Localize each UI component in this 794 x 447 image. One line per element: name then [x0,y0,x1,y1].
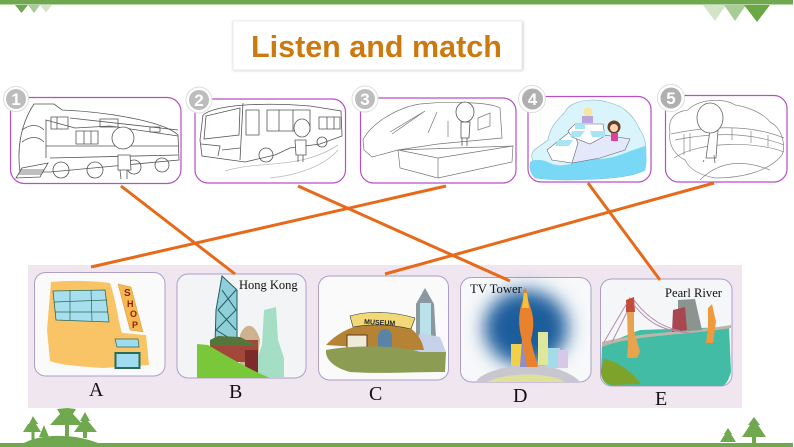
top green bar [0,0,793,4]
card D TV Tower [460,278,591,382]
boat passenger purple [582,108,593,123]
panel: card 4 boat [528,96,651,182]
top left triangles [15,5,52,13]
letter labels: D [513,385,527,407]
letter labels [89,379,667,410]
boat cloud [532,100,646,180]
letter labels: B [229,381,242,403]
top right triangles [703,5,770,22]
card A shop [34,272,165,376]
letter labels: A [89,379,104,401]
card E Pearl River [600,279,732,386]
boat water [530,146,646,179]
number badge 4: 4 [528,90,538,109]
boat hull [572,130,630,163]
number badge 2: 2 [194,91,204,110]
panel: card 5 bridge [666,96,787,182]
card C museum: MUSEUM [364,319,395,328]
title [233,21,523,70]
boat passenger pink [608,120,620,141]
boat cabin [568,124,605,144]
boat windows [555,124,605,146]
card C museum [318,276,448,380]
letter labels: C [369,383,382,405]
number badge 2 [186,87,212,113]
panel: card 3 van [360,98,516,183]
trees left [23,408,98,443]
number badge 3: 3 [360,90,370,109]
card B Hong Kong [177,274,306,378]
boat bow [547,130,578,163]
card A shop: O [130,309,137,319]
number badge 5 [658,84,684,112]
card A shop: P [132,320,138,330]
card A shop: H [127,299,134,309]
card B Hong Kong: Hong Kong [239,278,298,292]
number badge 3 [352,86,378,112]
bottom green bar [0,443,793,447]
card D TV Tower: TV Tower [470,282,523,296]
number badge 5: 5 [666,89,676,108]
panel: matching pictures background [28,265,742,410]
card A shop: S [124,288,131,299]
title: Listen and match [251,30,502,64]
panel: card 1 train [10,98,181,184]
card E Pearl River: Pearl River [665,286,723,300]
number badge 1 [4,86,28,112]
number badge 1: 1 [11,90,21,109]
number badge 4 [518,86,546,112]
panel: card 2 bus [195,99,346,183]
letter labels: E [655,388,667,410]
trees right [720,417,766,443]
matching lines [91,183,714,281]
